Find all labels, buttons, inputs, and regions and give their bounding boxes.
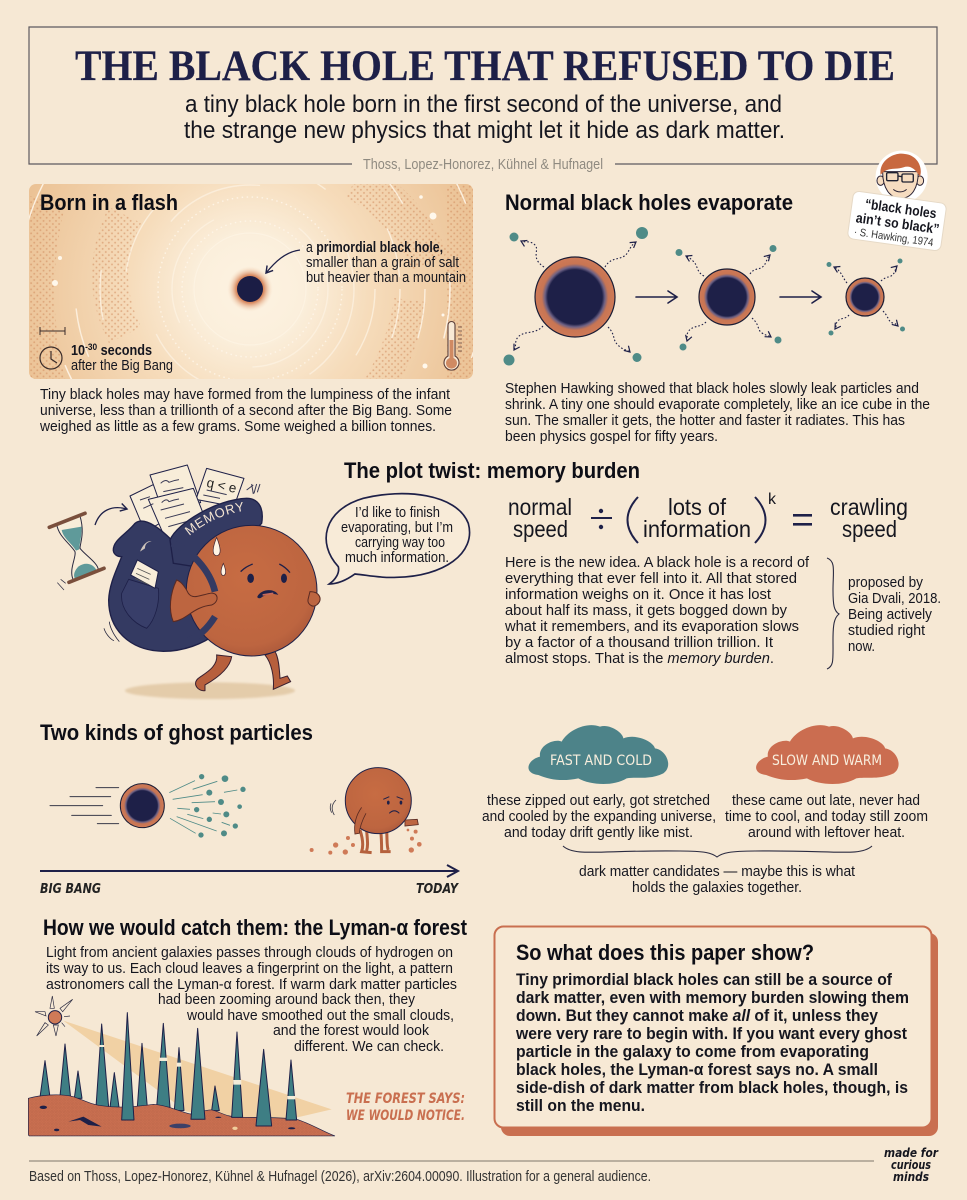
- heading: How we would catch them: the Lyman-α forest: [43, 915, 468, 940]
- body text: still on the menu.: [516, 1097, 645, 1115]
- icon: thermometer: [444, 322, 462, 370]
- body text: sun. The smaller it gets, the hotter and faster it radiates. This has: [505, 412, 905, 429]
- backpack: MEMORY: [184, 502, 243, 536]
- heading: Born in a flash: [40, 190, 178, 215]
- illustration: early universe panel: [29, 184, 473, 379]
- equation: k: [768, 491, 777, 508]
- body text: been physics gospel for fifty years.: [505, 428, 718, 445]
- body text: almost stops. That is the memory burden.: [505, 650, 774, 667]
- side note: [848, 574, 941, 655]
- subtitle: a tiny black hole born in the first second of the universe, and: [185, 91, 782, 118]
- panel: normal black holes evaporate: [504, 151, 947, 445]
- speech bubble: carrying way too: [355, 534, 445, 551]
- body text: down. But they cannot make all of it, unless they: [516, 1007, 879, 1025]
- body text: [46, 944, 457, 1055]
- subtitle: [184, 91, 785, 144]
- body text: everything that ever fell into it. All that stored: [505, 570, 797, 587]
- label: memory: [189, 510, 252, 536]
- text: slow and warm: time to cool, and today still zoom: [725, 808, 928, 825]
- body text: particle in the galaxy to come from evaporating: [516, 1043, 869, 1061]
- equation: information: [643, 516, 751, 542]
- body text: its way to us. Each cloud leaves a fingerprint on the light, a pattern: [46, 960, 453, 977]
- icon: hourglass: [49, 513, 104, 590]
- footer: [29, 1146, 939, 1185]
- icon: sun: [35, 996, 73, 1036]
- illustration: fast black hole emitting particles: [50, 774, 246, 838]
- body text: universe, less than a trillionth of a second after the Big Bang. Some: [40, 402, 452, 419]
- chart: shrinking black holes: [504, 227, 905, 366]
- arrow: [266, 250, 300, 273]
- header box: [29, 27, 937, 173]
- ground: [28, 1095, 335, 1136]
- body text: Tiny black holes may have formed from the lumpiness of the infant: [40, 386, 451, 403]
- time label: after the Big Bang: [71, 358, 173, 374]
- sticker: Hawking quote: ain’t so black”: [855, 209, 940, 237]
- text: slow and warm: these came out late, never had: [732, 792, 920, 809]
- brace: [827, 558, 839, 669]
- sticker: Hawking quote: [847, 151, 947, 251]
- panel: lyman-alpha forest: [28, 915, 468, 1136]
- heading: Normal black holes evaporate: [505, 190, 793, 215]
- body text: Light from ancient galaxies passes through clouds of hydrogen on: [46, 944, 453, 961]
- brace: [563, 846, 872, 857]
- body text: [504, 554, 810, 667]
- heading: So what does this paper show?: [516, 940, 814, 965]
- credit: Based on Thoss, Lopez-Honorez, Kühnel & Hufnagel (2026), arXiv:2604.00090. Illustration for a general audience.: [29, 1168, 651, 1185]
- body text: dark matter, even with memory burden slowing them: [516, 989, 909, 1007]
- subtitle: the strange new physics that might let it hide as dark matter.: [184, 117, 785, 144]
- equation: speed: [842, 516, 897, 542]
- body text: by a factor of a thousand trillion trillion. It: [505, 634, 774, 651]
- backpack: [108, 498, 263, 652]
- title: THE BLACK HOLE THAT REFUSED TO DIE: [75, 43, 895, 90]
- body text: about half its mass, it gets bogged down by: [505, 602, 787, 619]
- side note: Being actively: [848, 606, 932, 623]
- body text: information weighs on it. Once it has lost: [505, 586, 772, 603]
- callout text: but heavier than a mountain: [306, 270, 466, 286]
- text: fast and cold: and today drift gently like mist.: [504, 824, 693, 841]
- side note: studied right: [848, 622, 926, 639]
- panel: so what does this paper show: [494, 926, 938, 1136]
- callout: WE WOULD NOTICE.: [346, 1108, 465, 1124]
- made for curious minds: curious: [891, 1158, 931, 1172]
- equation: lots of: [668, 494, 726, 520]
- text: slow and warm: around with leftover heat.: [748, 824, 905, 841]
- panel: the plot twist: [47, 458, 941, 700]
- made for curious minds: [884, 1146, 939, 1184]
- sticker: Hawking quote: · S. Hawking, 1974: [853, 226, 934, 249]
- speech bubble: evaporating, but I’m: [341, 519, 453, 536]
- time label: 10: [71, 343, 87, 359]
- timeline labels: BIG BANG: [40, 881, 101, 897]
- made for curious minds: made for: [884, 1146, 939, 1160]
- icon: cartoon head: [876, 151, 928, 203]
- face: [241, 564, 290, 598]
- speech bubble: [326, 494, 470, 584]
- note: dark matter candidates: [579, 863, 856, 896]
- character: round black hole: [170, 525, 320, 691]
- body text: [39, 386, 452, 435]
- equation: normal: [508, 494, 572, 520]
- body text: and the forest would look: [273, 1022, 429, 1039]
- body text: had been zooming around back then, they: [158, 991, 415, 1008]
- text: slow and warm: [725, 792, 928, 841]
- speech bubble: much information.: [345, 549, 449, 566]
- heading: The plot twist: memory burden: [344, 458, 640, 483]
- arrow: hourglass to backpack: [95, 508, 127, 525]
- callout text: a primordial black hole,: [306, 240, 443, 256]
- callout: THE FOREST SAYS:: [346, 1091, 465, 1107]
- sweat drops: [213, 537, 220, 556]
- scale bar: [40, 327, 65, 335]
- callout text: [306, 240, 466, 286]
- body text: Here is the new idea. A black hole is a record of: [505, 554, 810, 571]
- note: dark matter candidates: dark matter candidates — maybe this is what: [579, 863, 856, 880]
- heading: Two kinds of ghost particles: [40, 720, 313, 745]
- icon: primordial black hole: [227, 266, 273, 312]
- text: fast and cold: [482, 792, 716, 841]
- equation: crawling: [830, 494, 908, 520]
- made for curious minds: minds: [893, 1170, 929, 1184]
- timeline arrow: [40, 865, 458, 877]
- icon: papers: [130, 465, 260, 542]
- body text: Tiny primordial black holes can still be a source of: [516, 971, 892, 989]
- cloud: slow and warm: [756, 725, 899, 784]
- illustration: slow sad black hole: [310, 768, 422, 855]
- side note: Gia Dvali, 2018.: [848, 590, 941, 607]
- body text: shrink. A tiny one should evaporate completely, like an ice cube in the: [505, 396, 930, 413]
- cloud: fast and cold: FAST AND COLD: [550, 753, 652, 769]
- time label: -30: [85, 342, 97, 353]
- body text: weighed as little as a few grams. Some weighed a billion tonnes.: [39, 418, 436, 435]
- body text: [505, 380, 930, 445]
- body text: would have smoothed out the small clouds,: [186, 1007, 454, 1024]
- callout text: smaller than a grain of salt: [306, 255, 459, 271]
- side note: now.: [848, 638, 875, 655]
- panel: two kinds of ghost particles: [40, 720, 928, 897]
- text: fast and cold: these zipped out early, got stretched: [487, 792, 710, 809]
- body text: [515, 971, 909, 1115]
- icon: papers: q < e: [205, 475, 238, 496]
- illustration: black hole carrying memory backpack: [104, 464, 360, 700]
- illustration: forest: [28, 996, 335, 1136]
- callout: [346, 1091, 465, 1124]
- note: dark matter candidates: holds the galaxies together.: [632, 879, 802, 896]
- text: fast and cold: and cooled by the expanding universe,: [482, 808, 716, 825]
- authors: Thoss, Lopez-Honorez, Kühnel & Hufnagel: [363, 156, 603, 173]
- time label: seconds: [97, 343, 152, 359]
- side note: proposed by: [848, 574, 923, 591]
- speech bubble: I’d like to finish: [355, 504, 440, 521]
- timeline labels: [40, 881, 459, 897]
- equation: speed: [513, 516, 568, 542]
- time label: [71, 342, 173, 374]
- equation: [508, 491, 908, 543]
- body text: were very rare to begin with. If you want every ghost: [515, 1025, 907, 1043]
- cloud: fast and cold: [528, 725, 668, 784]
- timeline labels: TODAY: [416, 881, 459, 897]
- icon: clock: [40, 347, 62, 369]
- body text: what it remembers, and its evaporation slows: [504, 618, 799, 635]
- body text: astronomers call the Lyman-α forest. If warm dark matter particles: [46, 976, 457, 993]
- body text: different. We can check.: [294, 1038, 444, 1055]
- body text: side-dish of dark matter from black holes, though, is: [516, 1079, 908, 1097]
- body text: black holes, the Lyman-α forest says no. A small: [516, 1061, 878, 1079]
- sticker: Hawking quote: “black holes: [864, 195, 938, 221]
- body text: Stephen Hawking showed that black holes slowly leak particles and: [505, 380, 919, 397]
- cloud: slow and warm: SLOW AND WARM: [772, 753, 882, 769]
- panel: born in a flash: [29, 184, 473, 434]
